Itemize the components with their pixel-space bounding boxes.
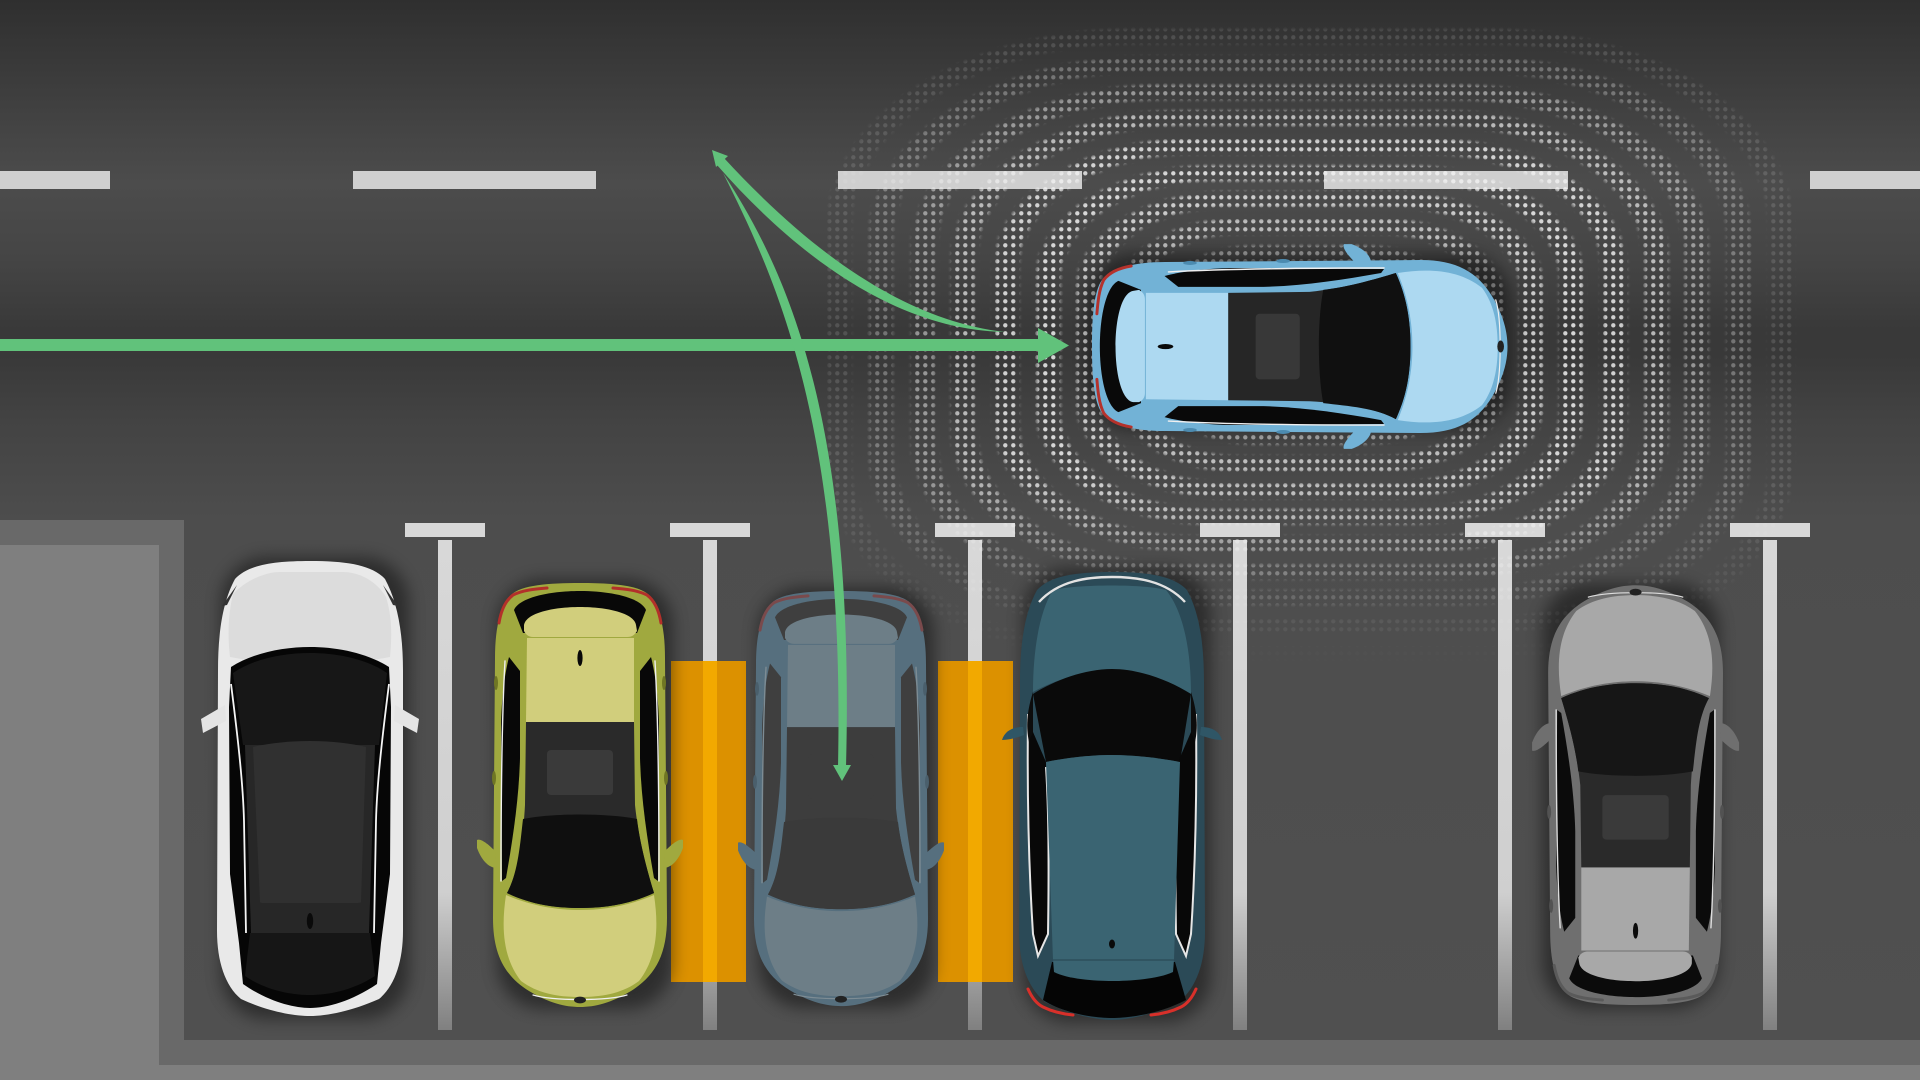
car: ghosted blue-grey target car <box>738 587 944 1008</box>
arrow: curved path to upper left from moving car <box>712 150 1005 332</box>
car: light-blue moving car <box>1088 244 1509 449</box>
sensor dot field around the moving car <box>827 28 1792 632</box>
arrow: curved reverse path into the gap <box>723 173 851 781</box>
highlighted gap: left orange zone <box>671 661 746 982</box>
car: white SUV <box>201 557 419 1019</box>
sidewalk <box>0 545 1920 1080</box>
car: yellow hatchback <box>477 579 683 1009</box>
car: teal SUV <box>1002 568 1222 1022</box>
kerb band <box>0 520 1920 1080</box>
parking bay lines <box>405 523 1810 1030</box>
arrow: straight driving path <box>0 328 1069 363</box>
highlighted gap: right orange zone <box>938 661 1013 982</box>
lane dashes <box>0 171 1920 189</box>
car: silver hatchback <box>1532 583 1739 1009</box>
